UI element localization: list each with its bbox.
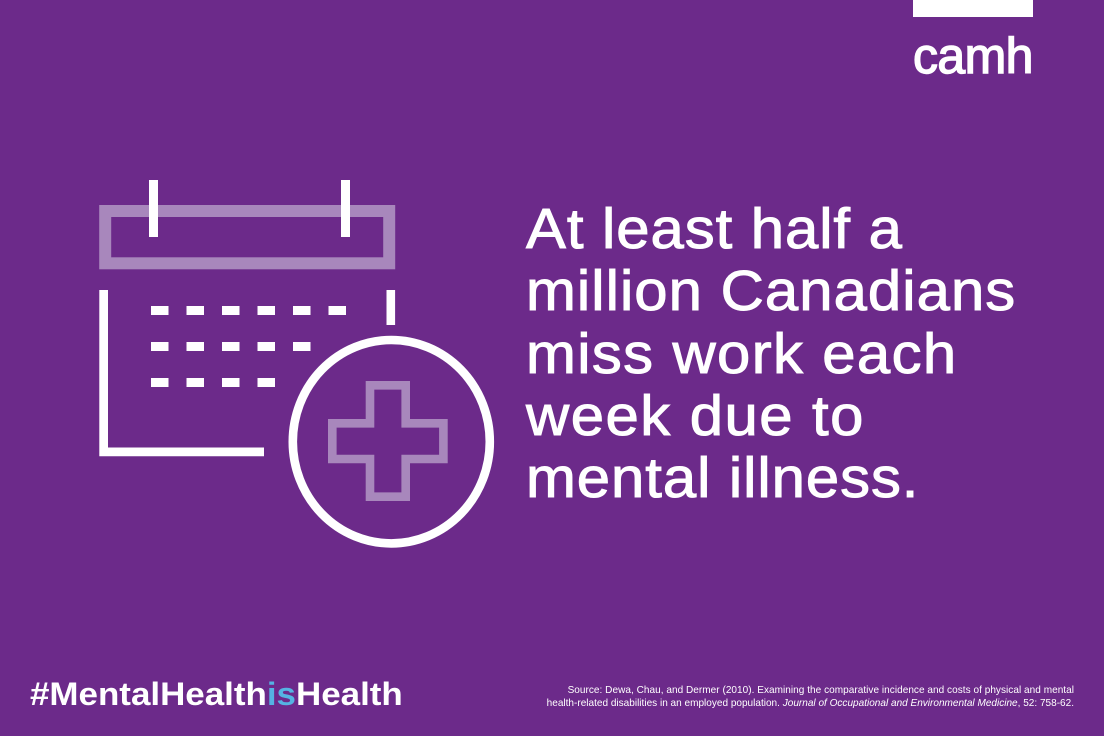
calendar binding rings [149,180,350,237]
source citation [547,685,1074,708]
headline: At least half a [526,197,903,261]
calendar body outline [99,290,395,456]
headline: million Canadians [526,259,1016,323]
medical cross [332,385,443,497]
calendar date dashes [151,306,346,387]
source citation: Source: Dewa, Chau, and Dermer (2010). Examining the comparative incidence and costs of physical and mental [568,685,1074,696]
logo: camh: camh [913,28,1033,84]
headline [525,197,1016,510]
headline: mental illness. [526,446,919,510]
headline: miss work each [526,322,958,386]
logo tab [913,0,1033,17]
source citation: health-related disabilities in an employed population. Journal of Occupational and Environmental Medicine, 52: 758-62. [547,698,1074,708]
calendar header bar [105,211,389,263]
hashtag: #MentalHealthisHealth [30,676,403,712]
circle badge [293,340,490,543]
headline: week due to [526,384,865,448]
